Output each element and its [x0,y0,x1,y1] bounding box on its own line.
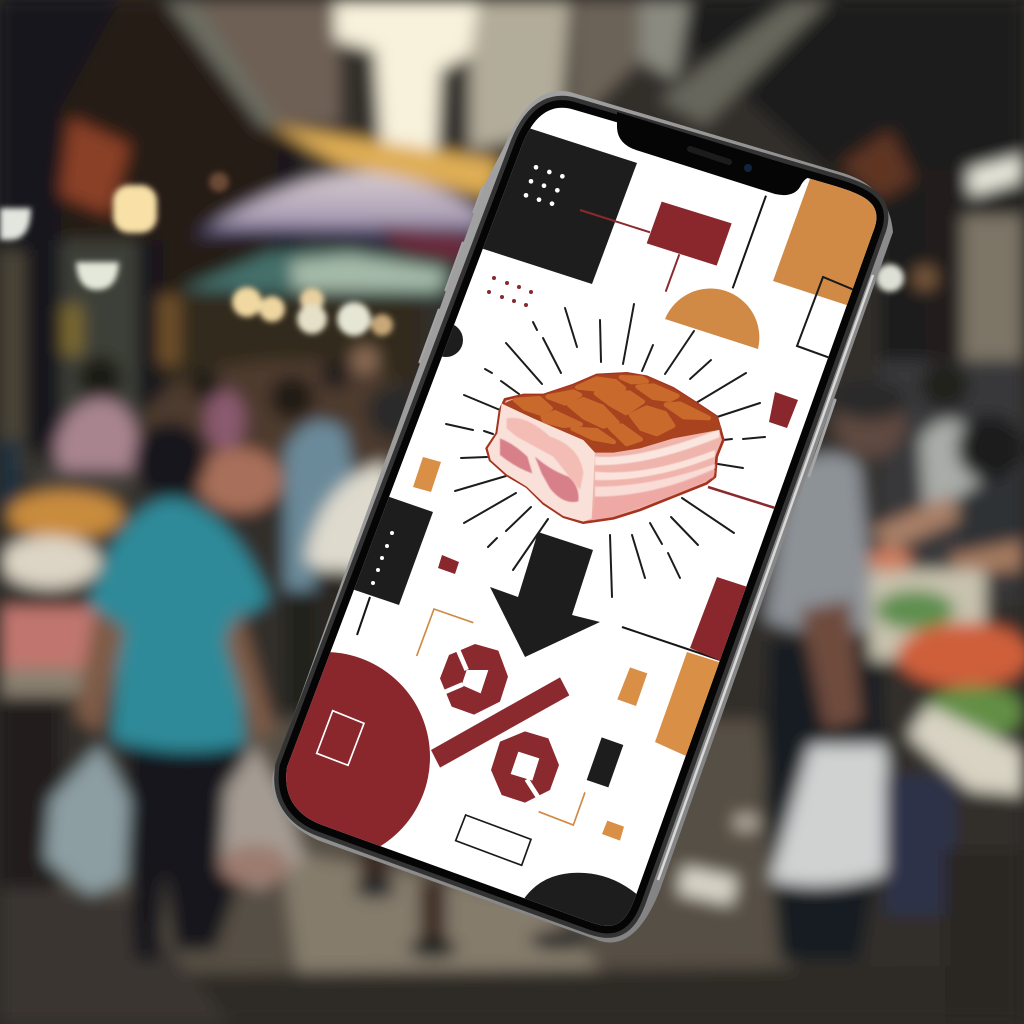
red dot grid [487,276,533,307]
camera [744,164,752,172]
small red rectangle right [769,392,798,428]
shopping bag right [770,745,895,886]
red rectangle with connectors [580,202,732,292]
smaller blurred lights [0,172,904,336]
striped man [765,640,885,960]
black half circle bottom [524,872,636,926]
shopping bags left [45,745,130,895]
roast pork belly illustration [487,373,723,523]
orange tall rectangle [655,652,722,756]
black connector line [357,597,370,635]
stripes [592,429,719,520]
front cut face [488,403,595,522]
small orange block [617,667,647,706]
phone [272,91,893,942]
crowd [140,360,440,500]
market mid tones [60,240,140,420]
down arrow [490,532,600,657]
tiny orange block [602,821,624,841]
black rectangle with dots [354,496,433,605]
small red block [438,555,459,574]
composition, top [465,122,766,292]
phone side buttons [420,187,835,476]
white shirt person [367,384,423,440]
orange block top right [773,178,876,306]
blue shirt person [128,745,245,960]
black line [733,196,766,288]
black half circle on left edge [442,325,463,357]
screen artwork [286,108,876,926]
composition, bottom [317,609,647,865]
percent sign [431,644,569,803]
orange half circle [665,289,759,349]
big red circle [286,652,430,846]
burst rays [446,304,765,597]
floor [0,720,800,1024]
red line right of meat [708,487,775,508]
ceiling left [0,0,300,330]
red rectangle right [690,577,746,661]
outline rectangle [796,276,853,358]
black line right [622,627,720,660]
black square with dots [482,128,637,284]
meat outline and side [487,373,723,523]
notch [617,112,815,195]
crispy crust [503,373,722,453]
pink person [78,356,122,400]
legs at bottom centre [360,840,390,895]
phone body [272,91,893,942]
left stall [7,491,123,539]
grey-blue person [270,376,314,420]
small orange rectangle left [413,457,441,492]
white outline square [317,711,364,765]
black outline rectangle [456,815,531,865]
orange bracket [417,609,473,656]
awnings [270,125,500,197]
orange corner bracket [539,792,585,825]
small black block [587,737,623,787]
right people [880,360,1024,600]
right stall [870,570,985,660]
right side ceiling [640,0,1024,380]
speaker [690,149,729,162]
